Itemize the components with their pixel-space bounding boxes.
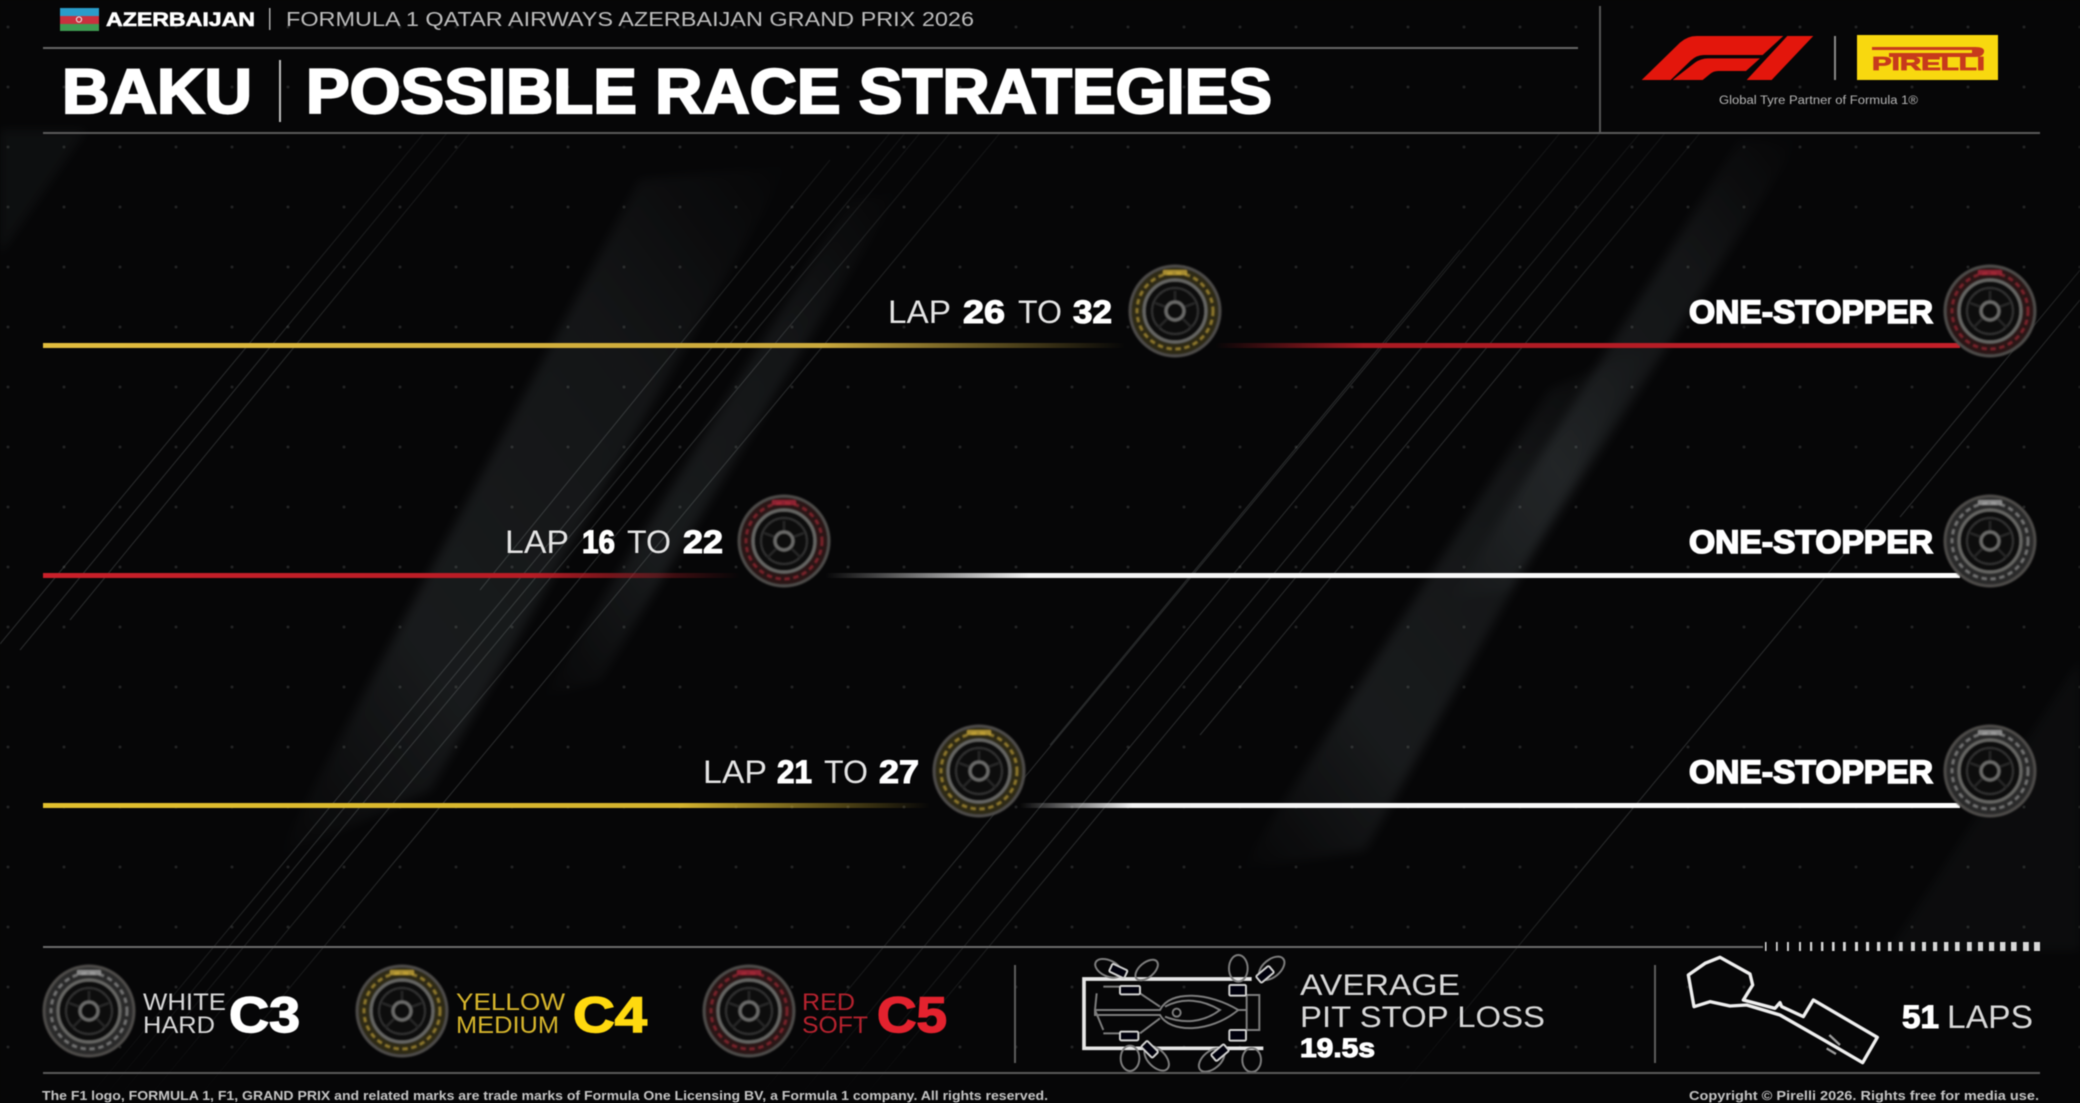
- lap count: LAPS: [1947, 999, 2033, 1035]
- strategy 1: [43, 266, 2035, 356]
- icon: Azerbaijan flag: [60, 8, 99, 31]
- logo: F1: [1642, 36, 1813, 80]
- legend: C3 hard: [44, 966, 300, 1056]
- icon: yellow tyre: [934, 726, 1024, 816]
- icon: red tyre: [739, 496, 829, 586]
- stint line: medium to hard: [43, 803, 1960, 808]
- compound label: RED: [802, 989, 855, 1016]
- stint line: soft to hard: [43, 573, 1960, 578]
- country name: AZERBAIJAN: [106, 10, 255, 31]
- compound label: [802, 989, 868, 1039]
- strategy name: ONE-STOPPER: [1689, 524, 1933, 560]
- logo: Pirelli: [1857, 35, 1998, 80]
- pit window label: 32: [1073, 294, 1112, 330]
- header: [43, 6, 2040, 134]
- pit window label: TO: [1018, 294, 1062, 330]
- footer copyright: Copyright © Pirelli 2026. Rights free for media use.: [1689, 1089, 2039, 1103]
- pit window label: 21: [777, 754, 812, 790]
- compound label: SOFT: [802, 1012, 868, 1039]
- icon: white tyre: [1945, 496, 2035, 586]
- pit window label: TO: [824, 754, 868, 790]
- legend: C4 medium: [357, 966, 647, 1056]
- pit window label: 27: [879, 754, 919, 790]
- compound code: C4: [573, 987, 647, 1043]
- icon: red tyre: [1945, 266, 2035, 356]
- pit window label: 26: [963, 294, 1005, 330]
- pit stop loss text: [1300, 969, 1545, 1063]
- strategy name: ONE-STOPPER: [1689, 754, 1933, 790]
- pit window label: LAP: [703, 754, 767, 790]
- pit stop loss text: 19.5s: [1300, 1033, 1375, 1063]
- strategy 2: [43, 496, 2035, 586]
- icon: Baku circuit map: [1688, 957, 1877, 1063]
- pit window label: LAP: [505, 524, 569, 560]
- strategy name: ONE-STOPPER: [1689, 294, 1933, 330]
- grand prix name: FORMULA 1 QATAR AIRWAYS AZERBAIJAN GRAND PRIX 2026: [286, 9, 974, 31]
- title: BAKU: [62, 57, 252, 127]
- compound code: C3: [229, 987, 300, 1043]
- pit stop loss text: AVERAGE: [1300, 969, 1460, 1002]
- logo: Pirelli: PIRELLI: [1872, 54, 1985, 74]
- icon: yellow tyre: [1130, 266, 1220, 356]
- bottom rule with lap ticks: [43, 942, 2040, 951]
- lap count: [1902, 999, 2033, 1035]
- icon: yellow tyre: [357, 966, 447, 1056]
- legend: C5 soft: [704, 966, 947, 1056]
- compound label: [143, 989, 226, 1039]
- pit stop loss text: PIT STOP LOSS: [1300, 1001, 1545, 1034]
- icon: white tyre: [44, 966, 134, 1056]
- compound label: WHITE: [143, 989, 226, 1016]
- partner tagline: Global Tyre Partner of Formula 1®: [1719, 95, 1919, 107]
- icon: white tyre: [1945, 726, 2035, 816]
- stint line: medium to soft: [43, 343, 1960, 348]
- pit window label: 22: [683, 524, 723, 560]
- compound code: C5: [877, 987, 947, 1043]
- pit window label: [703, 754, 919, 790]
- strategy 3: [43, 726, 2035, 816]
- compound label: HARD: [143, 1012, 215, 1039]
- pit window label: LAP: [888, 294, 951, 330]
- pit window label: TO: [627, 524, 671, 560]
- pit window label: 16: [582, 524, 615, 560]
- pit window label: [888, 294, 1112, 330]
- pit window label: [505, 524, 723, 560]
- title: POSSIBLE RACE STRATEGIES: [306, 57, 1272, 127]
- icon: pit stop car and crew: [1084, 952, 1289, 1076]
- compound label: [456, 989, 565, 1039]
- footer legal text: The F1 logo, FORMULA 1, F1, GRAND PRIX and related marks are trade marks of Formula One Licensing BV, a Formula 1 company. All rights reserved.: [42, 1089, 1048, 1103]
- compound label: MEDIUM: [456, 1012, 559, 1039]
- compound label: YELLOW: [456, 989, 565, 1016]
- icon: red tyre: [704, 966, 794, 1056]
- lap count: 51: [1902, 999, 1939, 1035]
